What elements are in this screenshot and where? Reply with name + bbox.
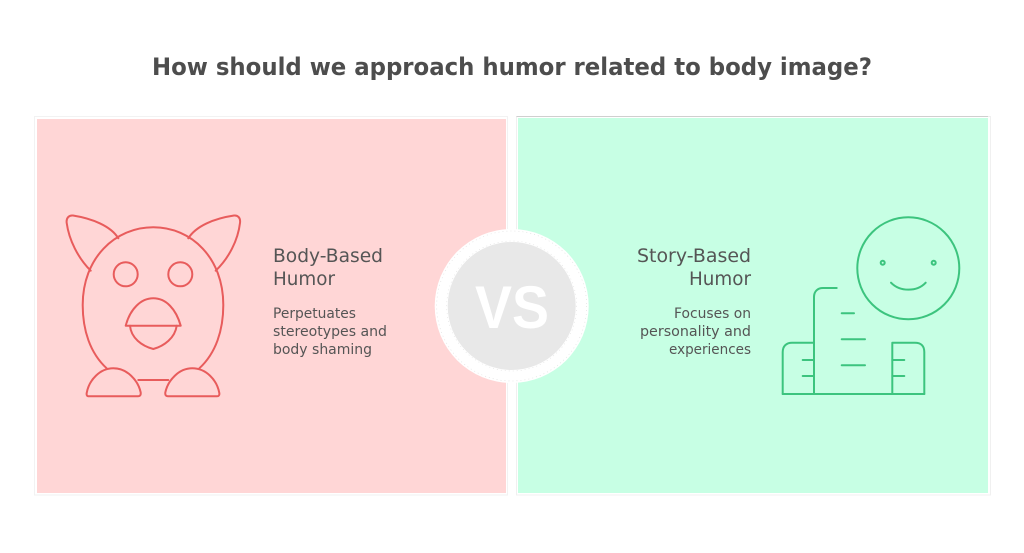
- heading: story-based humor: Story-Based: [637, 245, 751, 267]
- text: body-based description: [273, 306, 387, 358]
- text: body-based description: stereotypes and: [273, 324, 387, 340]
- text: body-based description: body shaming: [273, 342, 372, 358]
- title: How should we approach humor related to body image?: [152, 53, 872, 81]
- heading: story-based humor: [637, 245, 751, 290]
- text: story-based description: Focuses on: [674, 306, 751, 322]
- heading: story-based humor: Humor: [689, 268, 751, 290]
- panel: body-based humor: [34, 116, 508, 495]
- vs badge: [435, 229, 589, 383]
- heading: body-based humor: [273, 245, 383, 290]
- text: story-based description: [640, 306, 751, 358]
- text: story-based description: personality and: [640, 324, 751, 340]
- panel: story-based humor: [516, 116, 990, 495]
- text: story-based description: experiences: [669, 342, 751, 358]
- text: body-based description: Perpetuates: [273, 306, 356, 322]
- icon: furry creature: [67, 215, 240, 396]
- heading: body-based humor: Body-Based: [273, 245, 383, 267]
- heading: body-based humor: Humor: [273, 268, 335, 290]
- icon: smiley and book: [783, 217, 959, 394]
- vs label: VS: [475, 274, 549, 341]
